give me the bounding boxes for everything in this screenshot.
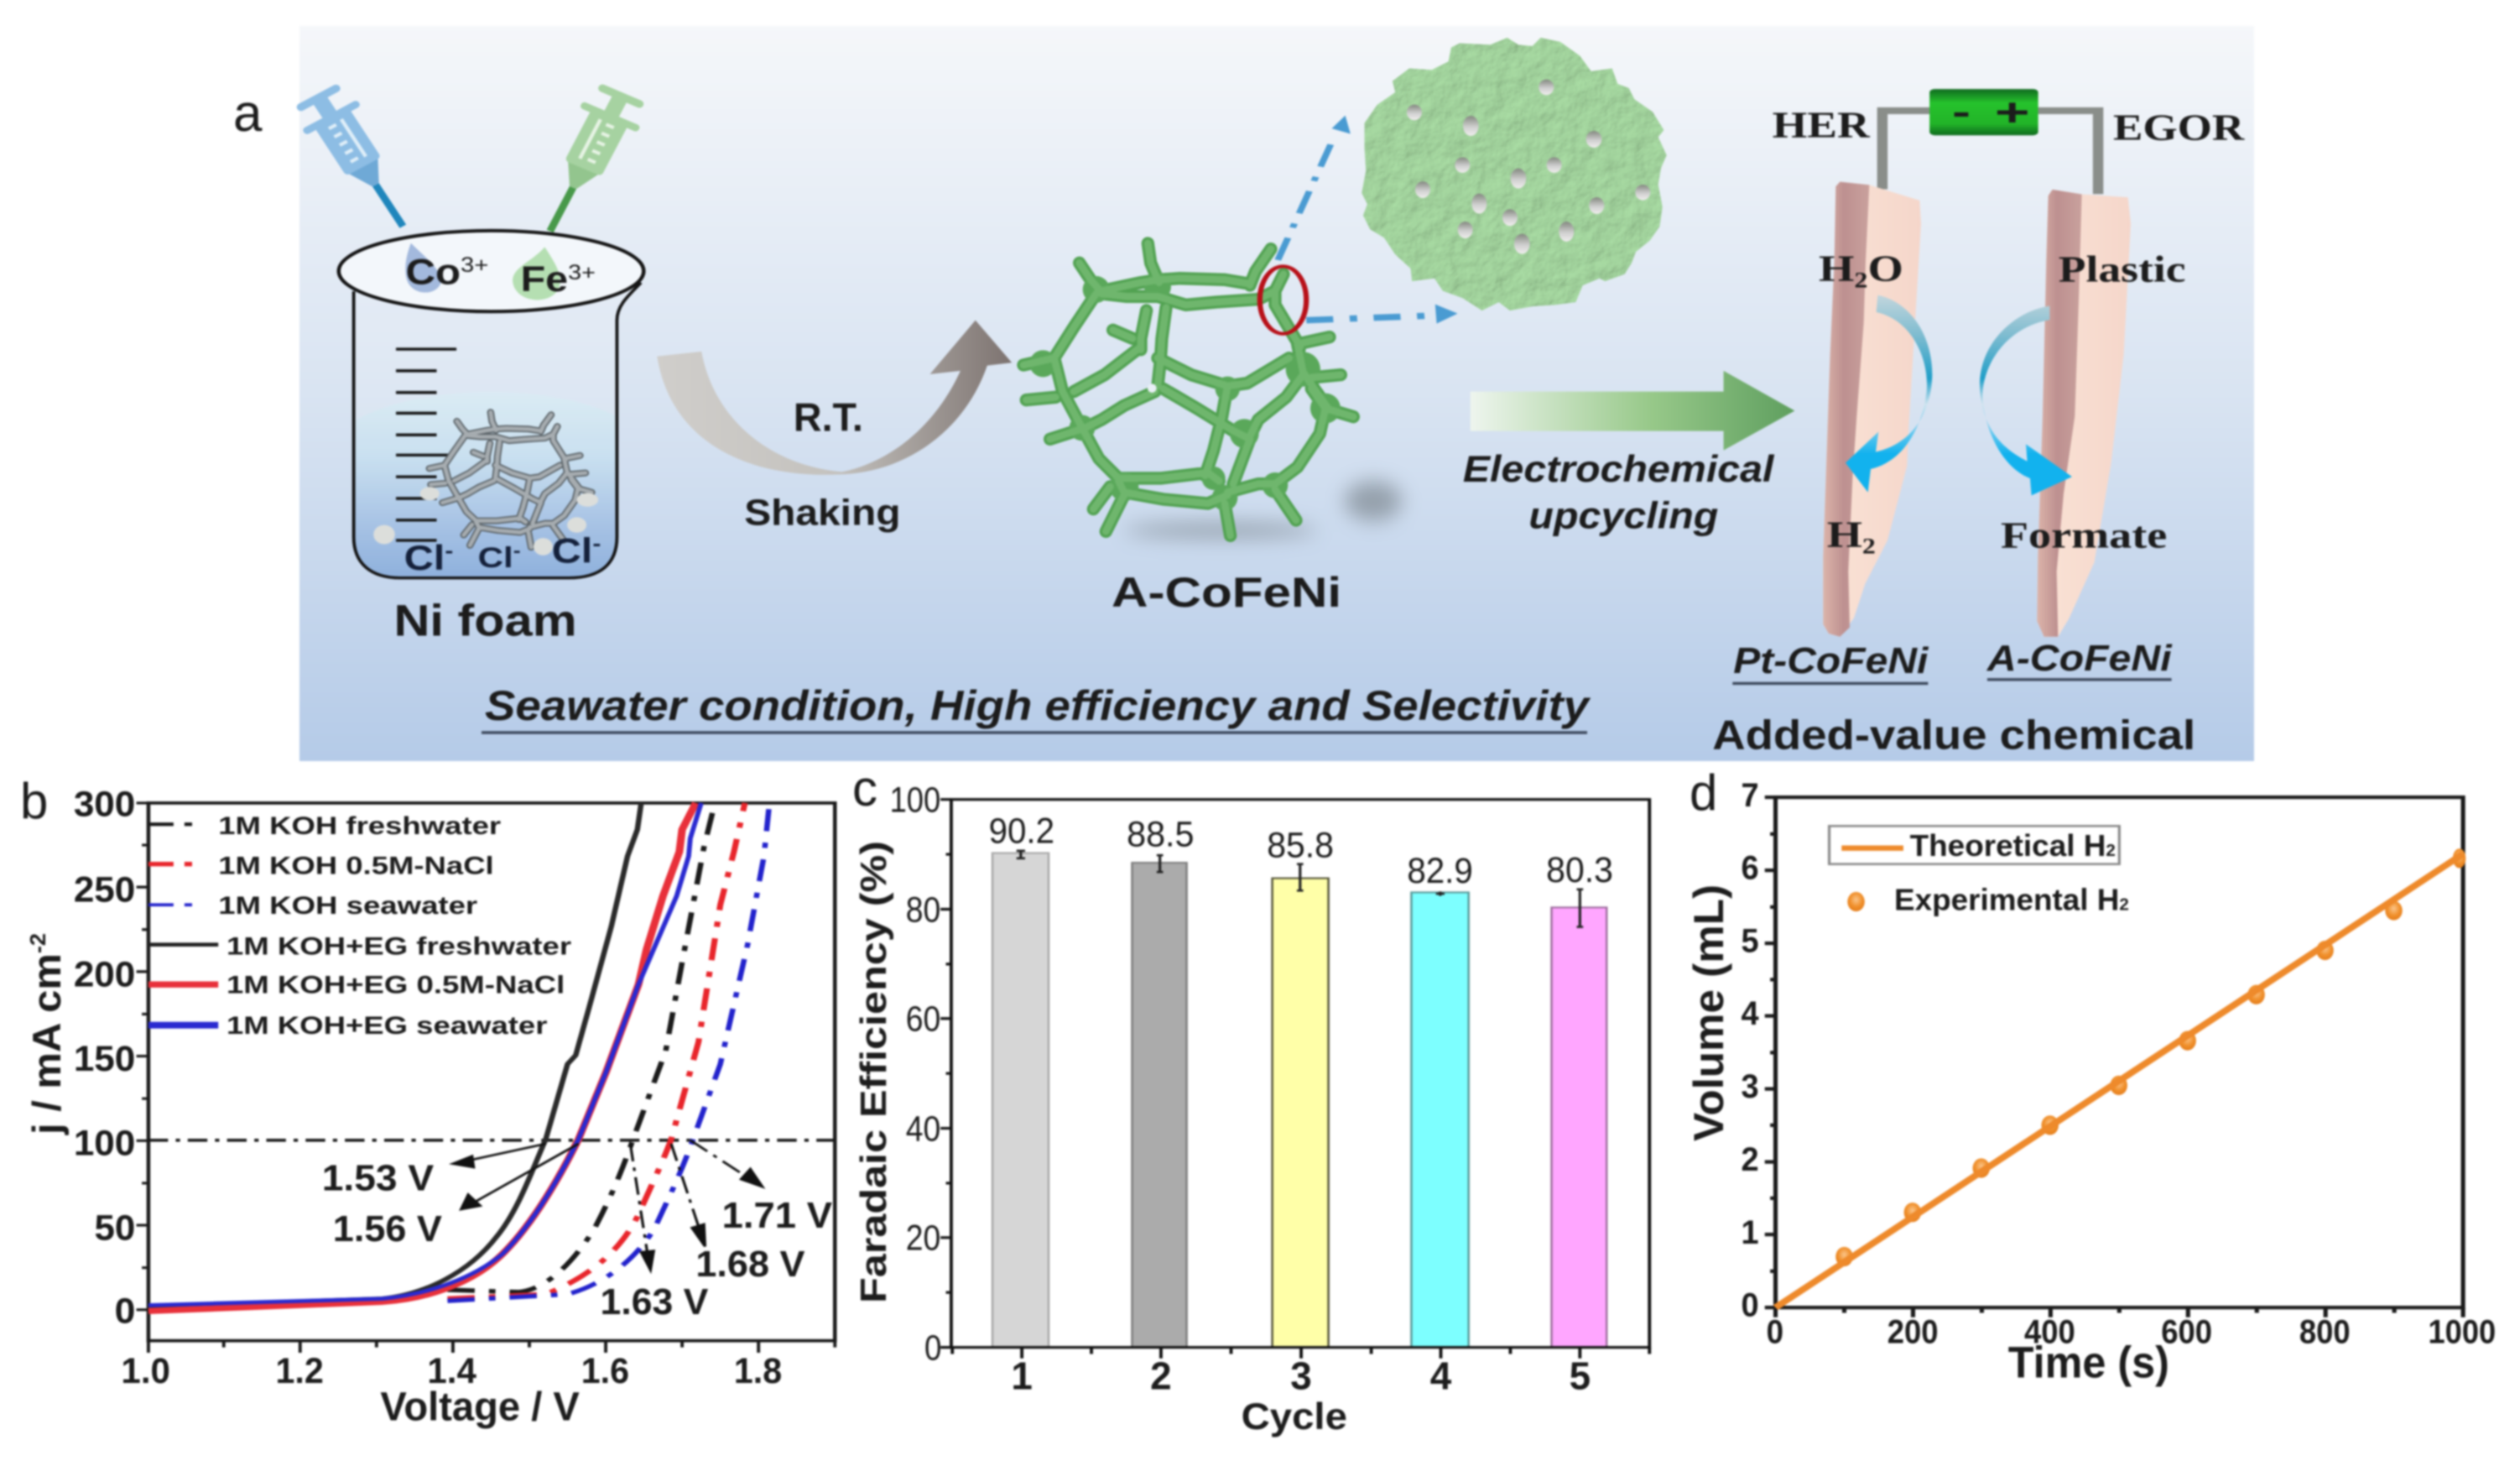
icon: green syringe <box>521 81 652 243</box>
y tick labels: 40 <box>906 1109 940 1148</box>
droplet: iron <box>513 247 560 300</box>
legend: 1M KOH+EG 0.5M-NaCl <box>226 972 565 999</box>
x axis title: Cycle <box>1242 1396 1347 1437</box>
label H2O: H <box>1819 248 1864 289</box>
bar value labels: 90.2 <box>989 811 1054 850</box>
label HER: HER <box>1773 104 1870 145</box>
beaker rim <box>339 231 643 311</box>
lattice shadow <box>1124 481 1402 538</box>
magnified nanosheet sphere <box>1362 38 1667 310</box>
curves <box>148 803 769 1311</box>
y tick labels: 0 <box>924 1328 941 1367</box>
droplet: cobalt <box>405 243 441 293</box>
external circuit wires <box>1882 111 2098 194</box>
y tick labels: 150 <box>74 1040 135 1079</box>
right electrode <box>2037 190 2131 637</box>
sphere body <box>1362 38 1667 310</box>
label Shaking: Shaking <box>744 492 900 533</box>
reference line at 100 <box>148 1137 835 1143</box>
label Cl- 2: Cl <box>478 541 510 574</box>
legend: 1M KOH+EG seawater <box>226 1012 548 1040</box>
y tick labels: 1 <box>1742 1214 1759 1251</box>
y tick labels: 7 <box>1742 777 1759 814</box>
y tick labels: 2 <box>1742 1141 1759 1178</box>
label Pt-CoFeNi: Pt-CoFeNi <box>1733 640 1929 681</box>
ion dots <box>373 487 598 556</box>
y tick labels: 60 <box>906 999 940 1039</box>
panel label c: c <box>852 760 877 816</box>
upper right schematic <box>1112 89 2245 616</box>
panel b: polarization curves <box>20 773 835 1429</box>
gray Ni foam lattice <box>430 412 591 547</box>
label Cl- 3: - <box>592 531 601 556</box>
label Electrochemical upcycling <box>1463 448 1775 537</box>
label Electrochemical upcycling: Electrochemical <box>1463 448 1775 490</box>
dash-dot black curve <box>447 803 715 1292</box>
x tick labels: 1000 <box>2428 1313 2496 1350</box>
label Cl- 2: - <box>513 540 521 561</box>
label Fe3+: Fe <box>521 258 567 300</box>
x tick labels: 1.6 <box>581 1351 629 1391</box>
x tick labels: 1.4 <box>427 1351 476 1391</box>
bar value labels: 85.8 <box>1267 825 1334 864</box>
annotation values: 1.63 V <box>601 1282 709 1323</box>
y tick labels: 3 <box>1742 1068 1759 1105</box>
theoretical line <box>1776 854 2463 1307</box>
sphere pores <box>1407 80 1650 254</box>
dash-dot zoom arrow up <box>1278 116 1351 260</box>
x tick labels: 1 <box>1011 1354 1033 1398</box>
axes frame and ticks <box>940 800 1649 1359</box>
bar value labels: 80.3 <box>1546 850 1613 890</box>
y tick labels: 200 <box>74 955 135 994</box>
dash-dot zoom arrow right <box>1306 305 1458 324</box>
y tick labels: 50 <box>95 1208 135 1248</box>
cyan reaction arrow right <box>1980 306 2072 495</box>
label Cl- 1: Cl <box>404 539 443 577</box>
annotation values: 1.56 V <box>333 1209 442 1249</box>
x tick labels <box>1767 1313 2496 1350</box>
axes frame and ticks <box>1765 797 2463 1317</box>
legend <box>148 812 571 1040</box>
red highlight ring <box>1260 266 1306 334</box>
electrodes and reaction arrows <box>1823 182 2131 637</box>
A-CoFeNi green lattice <box>1023 243 1402 538</box>
electrode labels <box>1712 248 2195 758</box>
y axis title: -2 <box>25 933 50 953</box>
icon: blue syringe <box>289 80 430 241</box>
legend: 1M KOH 0.5M-NaCl <box>218 852 494 879</box>
icon: battery: - <box>1952 91 1971 132</box>
label H2: 2 <box>1862 534 1876 559</box>
dash-dot red curve <box>447 803 745 1299</box>
y axis title: Faradaic Efficiency (%) <box>853 841 894 1303</box>
x tick labels <box>121 1351 782 1391</box>
y tick labels: 100 <box>74 1124 135 1164</box>
shaking arrow with labels <box>657 321 1012 533</box>
y tick labels: 300 <box>74 785 135 825</box>
label H2: H <box>1827 514 1872 555</box>
cyan reaction arrow left <box>1846 295 1932 493</box>
x tick labels <box>1011 1354 1591 1398</box>
annotation arrows <box>453 1140 763 1270</box>
label A-CoFeNi: A-CoFeNi <box>1112 568 1341 616</box>
label Co3+: Co <box>406 252 458 292</box>
legend: Theoretical H2 <box>1910 830 2116 863</box>
y tick labels: 250 <box>74 870 135 910</box>
annotation values <box>322 1158 833 1323</box>
label Cl- 1: - <box>445 539 453 562</box>
y tick labels: 5 <box>1742 923 1759 960</box>
y tick labels <box>890 780 941 1367</box>
solid black curve <box>148 803 641 1307</box>
label EGOR: EGOR <box>2113 107 2245 148</box>
y tick labels <box>74 785 135 1331</box>
label Formate: Formate <box>2001 514 2167 556</box>
error bars <box>1017 851 1583 927</box>
icon: battery <box>1929 89 2038 135</box>
x tick labels: 1.8 <box>734 1351 782 1391</box>
x tick labels: 1.2 <box>276 1351 324 1391</box>
bars <box>992 853 1606 1348</box>
bar value labels <box>989 811 1613 890</box>
icon: curved arrow <box>657 321 1012 475</box>
x tick labels: 200 <box>1887 1313 1939 1350</box>
x tick labels: 0 <box>1767 1313 1783 1350</box>
icon: battery: + <box>1995 91 2030 134</box>
x tick labels: 3 <box>1290 1354 1312 1398</box>
y tick labels: 80 <box>906 890 940 929</box>
label Electrochemical upcycling: upcycling <box>1528 495 1718 537</box>
y tick labels: 6 <box>1742 850 1759 887</box>
legend: 1M KOH freshwater <box>218 812 501 840</box>
label H2O: 2 <box>1854 269 1867 293</box>
annotation values: 1.68 V <box>695 1244 805 1285</box>
panel label b: b <box>20 773 48 829</box>
annotation values: 1.71 V <box>722 1196 833 1236</box>
solid red curve <box>148 803 695 1311</box>
x axis title: Time (s) <box>2008 1338 2169 1387</box>
legend: 1M KOH seawater <box>218 892 477 920</box>
y tick labels: 0 <box>115 1291 135 1331</box>
x tick labels: 4 <box>1430 1354 1452 1398</box>
label A-CoFeNi electrode: A-CoFeNi <box>1986 638 2173 679</box>
panel a background <box>299 26 2254 761</box>
x tick labels: 400 <box>2024 1313 2075 1350</box>
label Ni foam: Ni foam <box>393 595 577 645</box>
y tick labels <box>1742 777 1759 1324</box>
x tick labels: 800 <box>2299 1313 2351 1350</box>
panel c: faradaic efficiency bar chart <box>852 760 1649 1437</box>
legend: Experimental H2 <box>1894 884 2129 917</box>
x tick labels: 600 <box>2161 1313 2212 1350</box>
x tick labels: 1.0 <box>121 1351 170 1391</box>
experimental points <box>1835 848 2465 1266</box>
big green arrow <box>1471 371 1794 451</box>
y tick labels: 4 <box>1742 995 1759 1032</box>
x tick labels: 2 <box>1150 1354 1172 1398</box>
y tick labels: 20 <box>906 1218 940 1258</box>
panel a: synthesis and upcycling schematic <box>233 26 2254 761</box>
legend: 1M KOH+EG freshwater <box>226 932 571 960</box>
graduation ticks <box>396 349 456 540</box>
x axis title: Voltage / V <box>380 1384 580 1429</box>
left electrode <box>1823 182 1921 637</box>
y axis title: Volume (mL) <box>1685 884 1732 1141</box>
Cl ions and labels <box>373 487 601 645</box>
panel d: hydrogen volume chart <box>1685 764 2496 1387</box>
label Added-value chemical: Added-value chemical <box>1712 712 2195 758</box>
panel label a: a <box>233 85 263 143</box>
beaker body <box>354 283 641 578</box>
beaker liquid <box>354 392 617 578</box>
dash-dot blue curve <box>447 803 769 1301</box>
lattice struts <box>1023 243 1353 535</box>
bar value labels: 82.9 <box>1407 851 1473 890</box>
x tick labels: 5 <box>1570 1354 1591 1398</box>
caption: Seawater condition: Seawater condition, High efficiency and Selectivity <box>485 682 1591 729</box>
label H2O: O <box>1867 248 1903 289</box>
label Fe3+: 3+ <box>568 260 596 284</box>
label Co3+: 3+ <box>461 253 488 277</box>
annotation values: 1.53 V <box>322 1158 435 1198</box>
bar value labels: 88.5 <box>1127 815 1194 854</box>
y tick labels: 0 <box>1742 1287 1759 1324</box>
label Plastic: Plastic <box>2059 248 2186 290</box>
label Cl- 3: Cl <box>552 531 591 571</box>
beaker assembly <box>289 80 652 578</box>
axes frame and ticks <box>137 803 835 1353</box>
panel label d: d <box>1690 764 1717 821</box>
y axis title: j / mA cm <box>24 961 69 1135</box>
y tick labels: 100 <box>890 780 940 819</box>
sphere texture <box>1362 38 1667 310</box>
label R.T.: R.T. <box>794 395 863 440</box>
legend <box>1830 826 2129 917</box>
solid blue curve <box>148 803 701 1306</box>
